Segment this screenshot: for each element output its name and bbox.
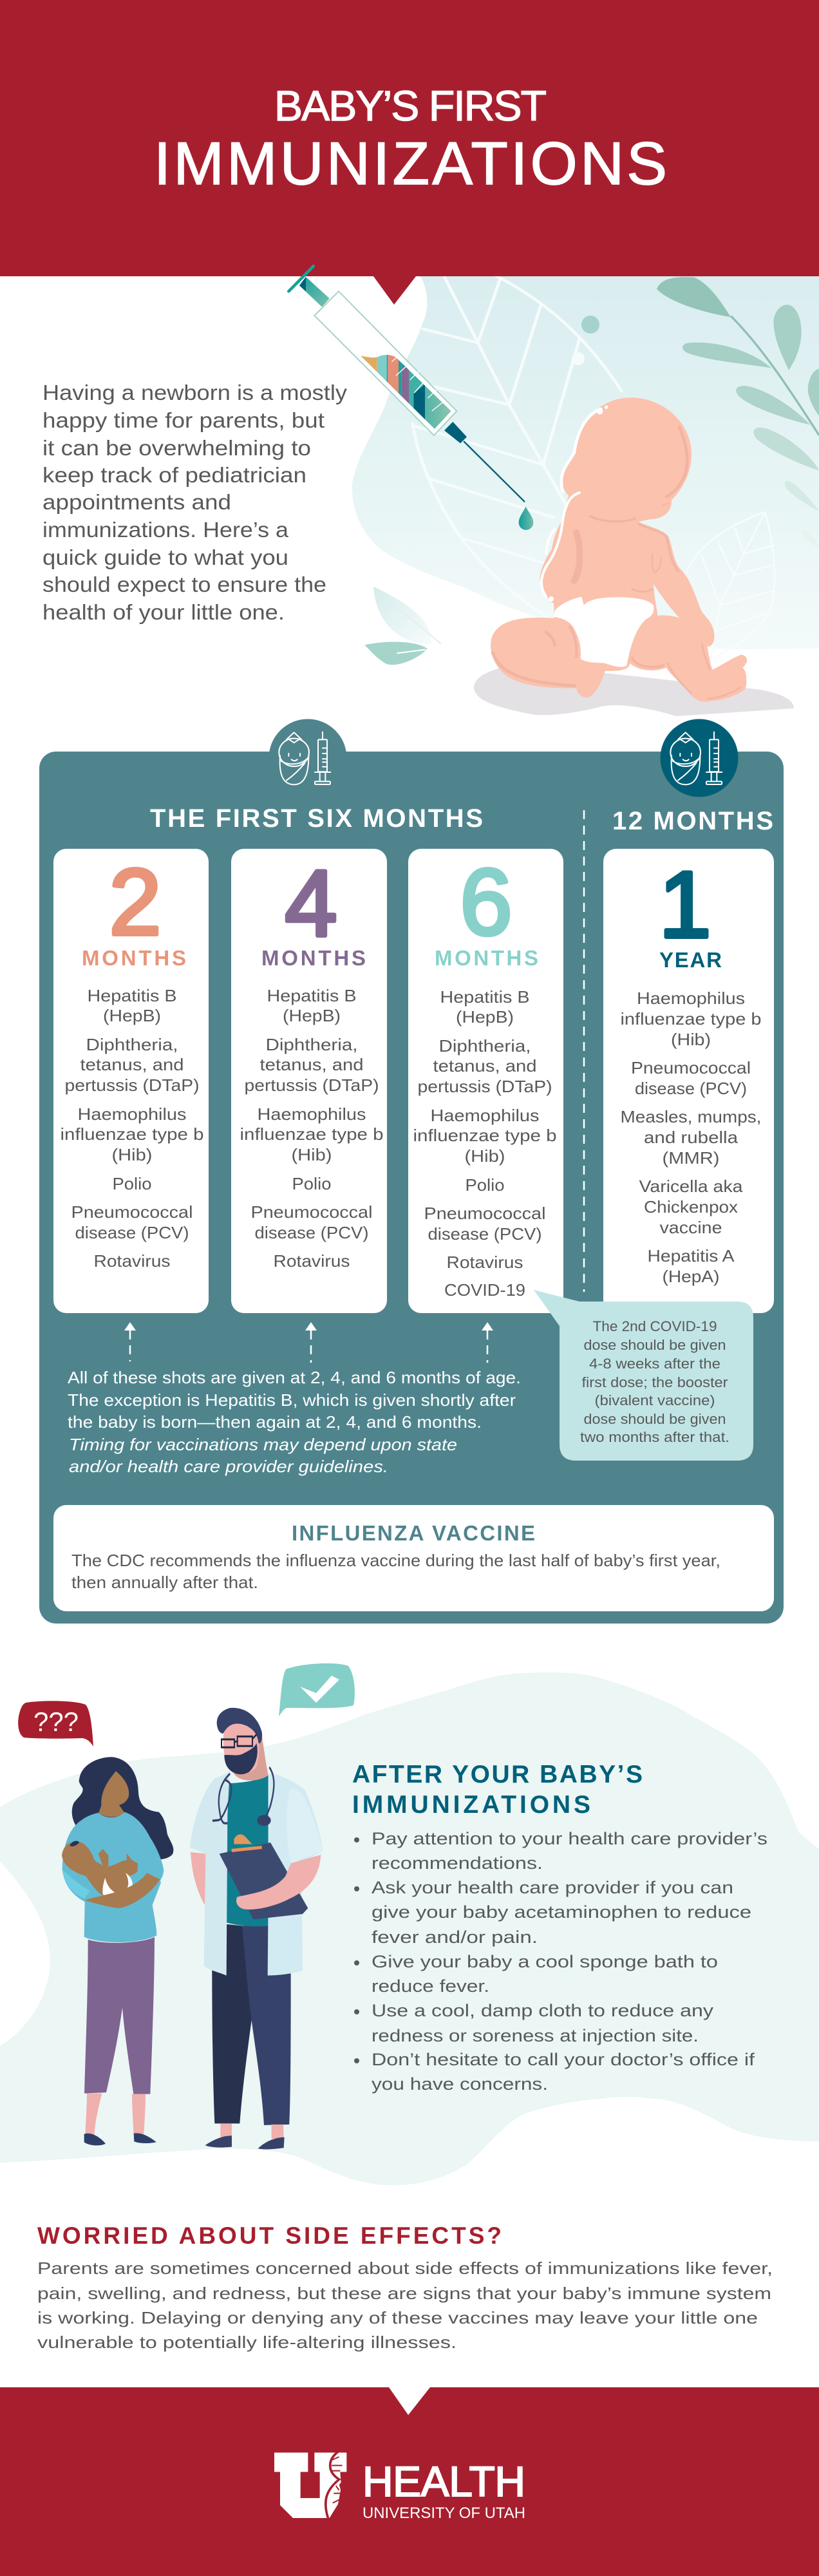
card: 1 year: Haemophilus [637, 989, 745, 1008]
right foliage branch [657, 277, 819, 548]
title: IMMUNIZATIONS [154, 129, 667, 197]
heading: the first six months: THE FIRST SIX MONTHS [150, 804, 483, 833]
card: 6 months: Polio [465, 1175, 505, 1195]
card: 4 months: disease (PCV) [255, 1223, 368, 1242]
card: 1 year: (MMR) [662, 1148, 720, 1168]
card: 1 year: YEAR [659, 948, 722, 972]
bullet list: aftercare tips: Use a cool, damp cloth to reduce any [372, 2001, 714, 2020]
card: 2 months: Polio [112, 1174, 152, 1193]
diaper [554, 597, 654, 667]
callout: COVID-19 dose note: dose should be given [583, 1411, 726, 1427]
side effects text: pain, swelling, and redness, but these are signs that your baby’s immune system [37, 2284, 771, 2303]
callout: COVID-19 dose note: The 2nd COVID-19 [592, 1318, 717, 1334]
card: 4 months [231, 849, 387, 1313]
intro text: should expect to ensure the [42, 573, 326, 596]
decorative circles [572, 316, 599, 365]
card: 1 year: Hepatitis A [648, 1246, 735, 1265]
callout: COVID-19 dose note: two months after that. [580, 1429, 730, 1445]
side effects text [37, 2259, 773, 2352]
bullet list: aftercare tips: Ask your health care provider if you can [372, 1878, 733, 1897]
card: 6 months: 6 [460, 849, 513, 954]
card: 1 year: Pneumococcal [631, 1058, 751, 1077]
card: 4 months: influenzae type b [240, 1124, 384, 1144]
logo: University of Utah Health [274, 2452, 525, 2522]
footer band with pointer [0, 2387, 819, 2576]
schedule note text: The exception is Hepatitis B, which is given shortly after [68, 1390, 516, 1410]
bullet list: aftercare tips: Give your baby a cool sponge bath to [372, 1952, 718, 1971]
aftercare background blob [0, 1672, 819, 2185]
card: 6 months: Pneumococcal [424, 1204, 546, 1223]
card: 1 year: influenzae type b [621, 1009, 761, 1028]
intro text: health of your little one. [42, 600, 285, 624]
callout: COVID-19 dose note: dose should be given [583, 1337, 726, 1353]
card: 6 months: influenzae type b [413, 1126, 556, 1145]
card: 6 months: COVID-19 [444, 1280, 525, 1300]
card: 4 months: 4 [285, 851, 337, 956]
card: influenza vaccine: INFLUENZA VACCINE [292, 1521, 535, 1545]
card: 6 months: tetanus, and [433, 1056, 537, 1075]
body shading [493, 427, 740, 699]
side effects text: is working. Delaying or denying any of these vaccines may leave your little one [37, 2308, 758, 2327]
icon: question speech bubble: ??? [33, 1707, 79, 1737]
card: 2 months: (Hib) [112, 1145, 152, 1164]
card: 2 months: Pneumococcal [71, 1202, 193, 1222]
card: 2 months: Haemophilus [77, 1104, 187, 1124]
heading: worried about side effects: WORRIED ABOUT SIDE EFFECTS? [37, 2222, 502, 2249]
icon: question speech bubble [18, 1701, 93, 1747]
callout: COVID-19 dose note [534, 1290, 753, 1461]
card: 4 months: Polio [292, 1174, 331, 1193]
card: 2 months: (HepB) [103, 1006, 161, 1025]
icon: swaddled baby and syringe, 12 months [670, 732, 722, 784]
big white leaf outline [413, 276, 621, 621]
icon: mother holding baby [62, 1757, 173, 2145]
icon: doctor with clipboard [190, 1708, 323, 2149]
card: 1 year: 1 [659, 852, 711, 957]
intro text: Having a newborn is a mostly [42, 381, 348, 404]
side effects text: vulnerable to potentially life-altering illnesses. [37, 2333, 457, 2352]
white highlights [541, 406, 608, 601]
schedule note text: All of these shots are given at 2, 4, and 6 months of age. [68, 1368, 521, 1387]
bullet list: aftercare tips: Pay attention to your health care provider’s [372, 1829, 767, 1848]
intro text: keep track of pediatrician [42, 463, 306, 487]
card: 4 months: Pneumococcal [251, 1202, 372, 1222]
card: 4 months: (Hib) [291, 1145, 332, 1164]
card: 6 months: Rotavirus [447, 1253, 523, 1272]
icon: check speech bubble [279, 1663, 355, 1716]
card: 6 months [408, 849, 563, 1313]
card: 1 year: disease (PCV) [635, 1079, 747, 1098]
intro text: immunizations. Here’s a [42, 518, 289, 542]
card: 2 months: pertussis (DTaP) [64, 1075, 200, 1095]
schedule note text [68, 1368, 521, 1476]
card: influenza vaccine: then annually after that. [71, 1573, 258, 1592]
panel: vaccination schedule [39, 719, 784, 1624]
dashed divider [583, 810, 585, 1292]
side effects text: Parents are sometimes concerned about side effects of immunizations like fever, [37, 2259, 773, 2278]
card: 2 months: influenzae type b [61, 1124, 203, 1144]
card: 4 months: MONTHS [261, 946, 366, 970]
card: 1 year: vaccine [659, 1218, 722, 1237]
card: 4 months: Hepatitis B [267, 986, 357, 1005]
arrow: from note to 6 months card [482, 1322, 493, 1363]
title [154, 82, 667, 197]
card: influenza vaccine: The CDC recommends the influenza vaccine during the last half of baby’s first year, [71, 1551, 720, 1570]
intro text: quick guide to what you [42, 545, 288, 569]
card: 4 months: (HepB) [283, 1006, 341, 1025]
logo mark: U with DNA strand [274, 2452, 348, 2519]
bullet list: aftercare tips: Don’t hesitate to call your doctor’s office if [372, 2050, 755, 2069]
card: 1 year [603, 849, 774, 1313]
icon: syringe [288, 266, 533, 530]
floor shadow under baby [474, 663, 794, 716]
arrow: from note to 2 months card [124, 1322, 136, 1361]
small leaves near baby [364, 587, 441, 665]
card: 6 months: (HepB) [456, 1007, 514, 1027]
heading: 12 months: 12 MONTHS [612, 807, 773, 835]
card: 2 months: MONTHS [82, 946, 186, 970]
card: 6 months: (Hib) [465, 1146, 505, 1166]
logo wordmark: HEALTH [362, 2458, 525, 2505]
callout: COVID-19 dose note: 4-8 weeks after the [589, 1356, 720, 1372]
intro text: appointments and [42, 490, 231, 514]
card: 4 months: Haemophilus [258, 1104, 366, 1124]
logo subtitle: UNIVERSITY OF UTAH [362, 2505, 525, 2522]
card: 6 months: MONTHS [435, 946, 538, 970]
schedule note text: and/or health care provider guidelines. [69, 1457, 388, 1476]
card: 6 months: Diphtheria, [439, 1036, 531, 1056]
card: 1 year: (HepA) [662, 1267, 720, 1286]
icon badge: 12 months [661, 719, 738, 797]
card: 6 months: disease (PCV) [428, 1224, 542, 1244]
heading: after your baby's immunizations: IMMUNIZATIONS [352, 1791, 590, 1819]
schedule note text: the baby is born—then again at 2, 4, and 6 months. [68, 1412, 482, 1432]
illustration background: pale blue blob [352, 276, 819, 649]
card: 2 months: tetanus, and [80, 1055, 184, 1074]
callout: COVID-19 dose note: first dose; the booster [582, 1374, 728, 1390]
title: BABY’S FIRST [274, 82, 547, 129]
bullet list: aftercare tips: you have concerns. [372, 2074, 548, 2094]
card: 2 months: disease (PCV) [75, 1223, 189, 1242]
card: 4 months: Diphtheria, [265, 1035, 358, 1054]
icon: swaddled baby and syringe [279, 732, 330, 784]
bullet list: aftercare tips: give your baby acetaminophen to reduce [372, 1902, 751, 1922]
panel background with icon tab [39, 719, 784, 1624]
card: 2 months: Hepatitis B [88, 986, 176, 1005]
intro text: it can be overwhelming to [42, 436, 311, 460]
bullet list: aftercare tips [354, 1829, 767, 2094]
card: 1 year: (Hib) [671, 1030, 711, 1049]
card: 2 months: 2 [109, 849, 162, 954]
intro text [42, 381, 348, 624]
heading: after your baby's immunizations: AFTER YOUR BABY’S [352, 1761, 643, 1788]
card: 1 year: Measles, mumps, [621, 1107, 761, 1126]
heading: after your baby's immunizations [352, 1761, 643, 1819]
card: 6 months: pertussis (DTaP) [417, 1077, 552, 1096]
card: 4 months: pertussis (DTaP) [245, 1075, 379, 1095]
header band with pointer [0, 0, 819, 305]
card: 2 months: Diphtheria, [86, 1035, 178, 1054]
callout: COVID-19 dose note: (bivalent vaccine) [595, 1392, 715, 1408]
card: 4 months: tetanus, and [260, 1055, 363, 1074]
card: 1 year: Chickenpox [644, 1197, 738, 1217]
bullet list: aftercare tips: fever and/or pain. [372, 1927, 538, 1947]
card: 1 year: and rubella [644, 1128, 739, 1147]
card: 4 months: Rotavirus [273, 1251, 350, 1271]
schedule note text: Timing for vaccinations may depend upon state [69, 1435, 457, 1454]
bullet list: aftercare tips: redness or soreness at injection site. [372, 2026, 699, 2045]
card: 6 months: Hepatitis B [440, 987, 529, 1007]
card: 2 months [53, 849, 209, 1313]
small white leaf behind baby [687, 512, 775, 659]
arrow: from note to 4 months card [305, 1322, 317, 1363]
card: 1 year: Varicella aka [639, 1177, 743, 1196]
card: 6 months: Haemophilus [430, 1106, 540, 1125]
intro text: happy time for parents, but [42, 408, 325, 432]
bullet list: aftercare tips: reduce fever. [372, 1976, 489, 1996]
baby body silhouette [491, 397, 747, 701]
card: influenza vaccine [53, 1505, 774, 1611]
bullet list: aftercare tips: recommendations. [372, 1853, 543, 1873]
icon: baby sitting, seen from behind [491, 397, 775, 701]
card: 2 months: Rotavirus [94, 1251, 170, 1271]
